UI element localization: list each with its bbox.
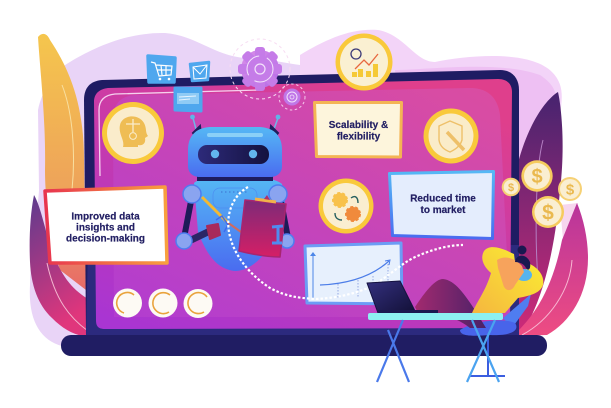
card: improved data [45,187,167,263]
person with laptop and desk [367,246,543,382]
clipboard [239,195,286,257]
icon: browser card [175,88,201,111]
chair stand [470,335,505,376]
small coin: $ [508,182,514,194]
text: reduced time: Reduced time [410,194,476,204]
background blob: right [300,30,562,330]
progress circles [113,288,212,318]
coin: gears and arrows [318,178,374,234]
leaf: purple left [30,195,90,336]
robot visor [198,145,269,164]
robot [176,115,294,271]
chair seat [460,320,516,336]
text: improved data: insights and [76,222,135,234]
robot head [188,127,282,177]
robot neck [197,175,273,181]
coins: dollar [502,160,582,228]
leaf: pale highlight [560,203,578,240]
leaf: orange left [38,34,86,290]
leaf: magenta right [513,203,588,336]
text: reduced time: to market [420,205,466,216]
right coin: $ [566,182,575,198]
background blob: left [30,33,300,347]
head [516,269,532,281]
icon: envelope card [190,62,209,81]
skin [497,258,524,290]
screen inner panel [113,88,510,317]
desk legs [377,320,409,382]
body [472,247,543,313]
robot torso [194,178,286,271]
chair back [503,294,531,328]
text: scalability: flexibility [337,132,381,142]
leaf: dark right [515,92,563,336]
bottom coin: $ [542,202,554,224]
robot arms [176,185,294,249]
coin: growth chart [336,34,392,90]
legs [415,279,486,328]
dashed path [228,187,463,299]
laptop base [61,335,547,356]
desk [368,313,503,320]
icon: shopping cart card [148,56,175,82]
chart card [305,243,402,304]
top coin: $ [531,166,543,188]
card: scalability [314,102,402,157]
laptop frame [84,70,519,336]
text: scalability: Scalability & [329,120,388,131]
hair [515,256,530,270]
icon: small gear [279,84,305,110]
icon: large gear [230,39,290,99]
pen [202,197,227,222]
coin: shield wrench [424,108,478,164]
robot antennae [190,115,280,137]
coin: head with arrows [102,102,164,164]
screen [94,79,512,329]
card: reduced time [390,172,494,238]
laptop [367,281,415,313]
text: improved data: decision-making [66,234,145,244]
text: improved data: Improved data [71,212,140,222]
robot chest panel [213,188,257,208]
